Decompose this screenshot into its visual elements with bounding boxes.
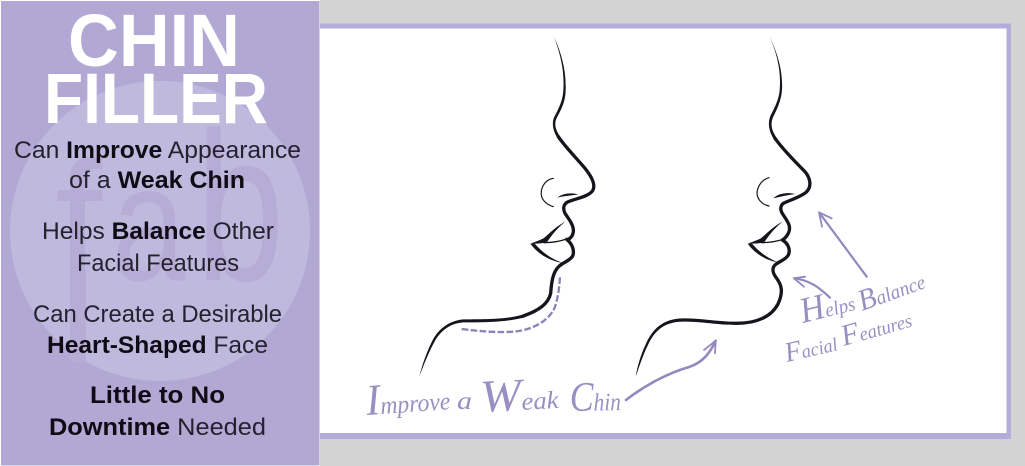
dashed line: improved chin contour bbox=[462, 277, 560, 332]
handwritten label: Helps Balance Facial Features: Balance bbox=[853, 263, 929, 318]
handwritten label: Improve a Weak Chin: Improve bbox=[363, 370, 451, 425]
title: CHIN bbox=[68, 0, 240, 82]
grey background bbox=[320, 0, 1025, 466]
benefit: heart-shaped face: Heart-Shaped Face bbox=[47, 332, 268, 359]
illustration: profile after, balanced chin bbox=[636, 37, 810, 377]
benefit: downtime: Downtime Needed bbox=[49, 414, 266, 441]
benefit: heart-shaped face: Can Create a Desirable bbox=[33, 301, 282, 328]
arrow: to nose bbox=[819, 212, 867, 277]
logo watermark: a bbox=[112, 131, 186, 315]
handwritten label: Improve a Weak Chin: a bbox=[457, 388, 472, 415]
title: FILLER bbox=[44, 60, 268, 139]
benefit: weak chin: of a Weak Chin bbox=[69, 167, 245, 194]
benefit: balance bbox=[42, 218, 274, 277]
framed illustration panel bbox=[320, 24, 1011, 439]
handwritten label: Improve a Weak Chin: Weak bbox=[479, 367, 560, 422]
title bbox=[44, 0, 268, 139]
benefit: weak chin: Can Improve Appearance bbox=[14, 137, 301, 164]
handwritten label: Helps Balance Facial Features: Helps bbox=[794, 279, 858, 331]
logo watermark: f bbox=[55, 127, 103, 317]
illustration: profile before, weak chin bbox=[419, 37, 594, 377]
arrow: to jawline bbox=[626, 341, 716, 400]
benefit: weak chin bbox=[14, 137, 301, 194]
arrow: to lips and chin bbox=[794, 277, 830, 298]
benefit: downtime bbox=[49, 382, 266, 441]
handwritten label: Improve a Weak Chin: Chin bbox=[569, 374, 621, 421]
handwritten label: Improve a Weak Chin bbox=[363, 367, 621, 425]
logo watermark: b bbox=[196, 88, 284, 325]
benefit: balance: Helps Balance Other bbox=[42, 218, 274, 245]
handwritten label: Helps Balance Facial Features: Facial bbox=[781, 327, 840, 369]
handwritten label: Helps Balance Facial Features bbox=[781, 263, 929, 369]
handwritten label: Helps Balance Facial Features: Features bbox=[836, 301, 915, 353]
benefit: downtime: Little to No bbox=[90, 382, 225, 409]
benefit: balance: Facial Features bbox=[77, 250, 239, 277]
logo watermark bbox=[10, 81, 310, 381]
panel: left summary bbox=[1, 0, 320, 466]
benefit: heart-shaped face bbox=[33, 301, 282, 359]
